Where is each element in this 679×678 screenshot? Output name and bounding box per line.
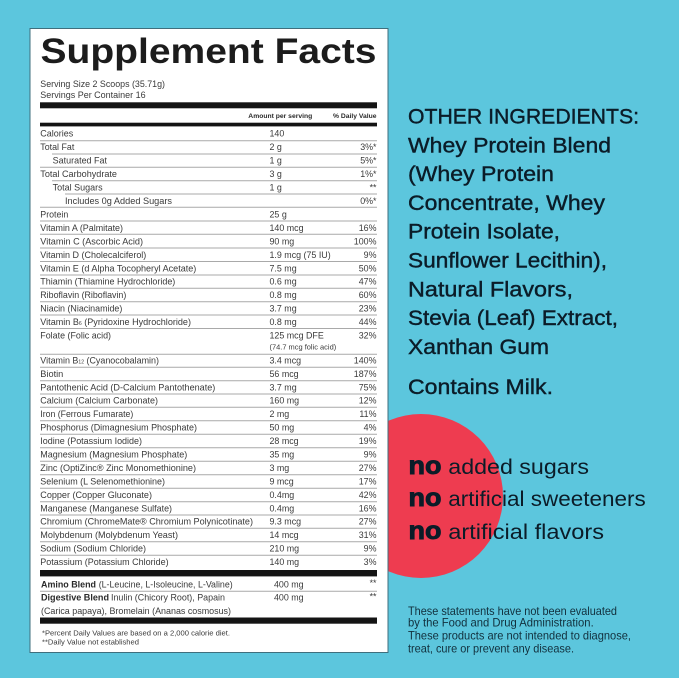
nutrient rows: Total Fat — [40, 142, 75, 152]
blends: 400 mg — [274, 593, 304, 603]
nutrient rows: 0%* — [360, 196, 377, 206]
nutrient rows: 23% — [359, 303, 377, 313]
nutrient rows: 3.7 mg — [270, 303, 297, 313]
nutrient rows: Vitamin A (Palmitate) — [40, 223, 123, 233]
nutrient rows: 1.9 mcg (75 IU) — [270, 250, 331, 260]
blends: Amino Blend — [41, 579, 96, 589]
nutrient rows: Thiamin (Thiamine Hydrochloride) — [40, 277, 175, 287]
nutrient rows: 27% — [359, 517, 377, 527]
nutrient rows: 27% — [359, 463, 377, 473]
nutrient rows: Sodium (Sodium Chloride) — [40, 544, 146, 554]
nutrient rows: Riboflavin (Riboflavin) — [40, 290, 126, 300]
nutrient rows: Pantothenic Acid (D-Calcium Pantothenate) — [40, 382, 215, 392]
nutrient rows: Iodine (Potassium Iodide) — [40, 436, 142, 446]
nutrient rows: 0.8 mg — [270, 317, 297, 327]
FDA disclaimer: These statements have not been evaluated — [408, 604, 617, 618]
nutrient rows: 140 mg — [270, 557, 299, 567]
nutrient rows: 31% — [359, 530, 377, 540]
nutrient rows: 50% — [359, 263, 377, 273]
other ingredients text: (Whey Protein — [408, 163, 554, 186]
nutrient rows — [40, 129, 377, 567]
nutrient rows: 3.7 mg — [270, 382, 297, 392]
claims list: no — [408, 452, 442, 480]
blends — [41, 578, 377, 616]
allergen note: Contains Milk. — [408, 376, 553, 399]
nutrient rows: 0.6 mg — [270, 277, 297, 287]
nutrient rows: Molybdenum (Molybdenum Yeast) — [40, 530, 178, 540]
claims list: no — [408, 517, 442, 545]
nutrient rows: 1 g — [270, 156, 282, 166]
nutrient rows: 187% — [354, 369, 377, 379]
nutrient rows: (74.7 mcg folic acid) — [270, 343, 336, 352]
nutrient rows: 210 mg — [270, 544, 299, 554]
nutrient rows: 3% — [364, 557, 377, 567]
nutrient rows: Saturated Fat — [53, 156, 108, 166]
nutrient rows: 1%* — [360, 169, 377, 179]
nutrient rows: 90 mg — [270, 236, 294, 246]
other ingredients text: Protein Isolate, — [408, 221, 560, 244]
nutrient rows: 35 mg — [270, 450, 294, 460]
blends: Digestive Blend — [41, 593, 109, 603]
other ingredients text: Natural Flavors, — [408, 279, 573, 302]
nutrient rows: 1 g — [270, 182, 282, 192]
nutrient rows: 9.3 mcg — [270, 517, 301, 527]
nutrient rows: Selenium (L Selenomethionine) — [40, 476, 165, 486]
FDA disclaimer: These products are not intended to diagnose, — [408, 628, 631, 642]
nutrient rows: 14 mcg — [270, 530, 299, 540]
nutrient rows: Vitamin D (Cholecalciferol) — [40, 250, 146, 260]
nutrient rows: 75% — [359, 382, 377, 392]
nutrient rows: 47% — [359, 277, 377, 287]
claims list: artificial flavors — [448, 520, 604, 544]
nutrient rows: 160 mg — [270, 396, 299, 406]
nutrient rows: Folate (Folic acid) — [40, 330, 111, 340]
nutrient rows: 9% — [364, 450, 377, 460]
claims list: added sugars — [448, 455, 589, 479]
claims list: no — [408, 484, 442, 512]
nutrient rows: 2 mg — [270, 409, 289, 419]
column headers: % Daily Value — [333, 113, 377, 120]
nutrient rows: 4% — [364, 422, 377, 432]
nutrient rows: Magnesium (Magnesium Phosphate) — [40, 450, 187, 460]
nutrient rows: Zinc (OptiZinc® Zinc Monomethionine) — [40, 463, 196, 473]
other ingredients text: Xanthan Gum — [408, 336, 549, 359]
nutrient rows: 11% — [359, 409, 377, 419]
nutrient rows: Biotin — [40, 369, 63, 379]
nutrient rows: 42% — [359, 490, 377, 500]
serving information — [40, 79, 165, 100]
footnotes: *Percent Daily Values are based on a 2,000 calorie diet. — [42, 630, 230, 637]
nutrient rows: 16% — [359, 503, 377, 513]
nutrient rows: 0.8 mg — [270, 290, 297, 300]
FDA disclaimer — [408, 604, 631, 655]
serving information: Servings Per Container 16 — [40, 90, 146, 100]
nutrient rows: 9 mcg — [270, 476, 294, 486]
nutrient rows: 56 mcg — [270, 369, 299, 379]
other ingredients text: Stevia (Leaf) Extract, — [408, 307, 618, 330]
nutrient rows: Potassium (Potassium Chloride) — [40, 557, 169, 567]
nutrient rows: Manganese (Manganese Sulfate) — [40, 503, 172, 513]
nutrient rows: 9% — [364, 250, 377, 260]
nutrient rows: 100% — [354, 236, 377, 246]
nutrient rows: Phosphorus (Dimagnesium Phosphate) — [40, 422, 197, 432]
nutrient rows: 0.4mg — [270, 503, 294, 513]
nutrient rows: Calcium (Calcium Carbonate) — [40, 396, 158, 406]
other ingredients text: Whey Protein Blend — [408, 134, 611, 157]
nutrient rows: 3.4 mcg — [270, 356, 301, 366]
icon: red circle behind claims — [339, 414, 503, 578]
other ingredients text — [408, 105, 639, 359]
nutrient rows: 3%* — [360, 142, 377, 152]
nutrient rows: 140% — [354, 356, 377, 366]
nutrient rows: Includes 0g Added Sugars — [65, 196, 173, 206]
other ingredients text: OTHER INGREDIENTS: — [408, 105, 639, 128]
blends: (L-Leucine, L-Isoleucine, L-Valine) — [99, 579, 233, 589]
serving information: Serving Size 2 Scoops (35.71g) — [40, 79, 165, 89]
FDA disclaimer: by the Food and Drug Administration. — [408, 616, 594, 630]
nutrient rows: 44% — [359, 317, 377, 327]
nutrient rows: Vitamin E (d Alpha Tocopheryl Acetate) — [40, 263, 196, 273]
nutrient rows: 125 mcg DFE — [270, 330, 324, 340]
nutrient rows: 9% — [364, 544, 377, 554]
panel: supplement facts label — [30, 28, 388, 652]
nutrient rows: Vitamin B12 (Cyanocobalamin) — [40, 356, 159, 366]
title: Supplement Facts — [40, 31, 376, 71]
nutrient rows: 140 mcg — [270, 223, 304, 233]
nutrient rows: 32% — [359, 330, 377, 340]
nutrient rows: Copper (Copper Gluconate) — [40, 490, 152, 500]
blends: Inulin (Chicory Root), Papain — [111, 593, 225, 603]
nutrient rows: Vitamin B6 (Pyridoxine Hydrochloride) — [40, 317, 191, 327]
nutrient rows: 5%* — [360, 156, 377, 166]
other ingredients text: Concentrate, Whey — [408, 192, 606, 215]
nutrient rows: 19% — [359, 436, 377, 446]
nutrient rows: 3 mg — [270, 463, 289, 473]
blends: (Carica papaya), Bromelain (Ananas cosmosus) — [41, 606, 231, 616]
FDA disclaimer: treat, cure or prevent any disease. — [408, 641, 574, 655]
nutrient rows: 25 g — [270, 210, 287, 220]
other ingredients text: Sunflower Lecithin), — [408, 250, 607, 273]
claims list: artificial sweeteners — [448, 487, 646, 511]
nutrient rows: 140 — [270, 129, 284, 139]
nutrient rows: 0.4mg — [270, 490, 294, 500]
nutrient rows: 60% — [359, 290, 377, 300]
nutrient rows: 2 g — [270, 142, 282, 152]
blends: 400 mg — [274, 579, 304, 589]
nutrient rows: Total Sugars — [53, 182, 103, 192]
nutrient rows: 16% — [359, 223, 377, 233]
column headers — [248, 113, 377, 120]
blends: ** — [370, 592, 377, 602]
footnotes: **Daily Value not established — [42, 640, 139, 647]
nutrient rows: Vitamin C (Ascorbic Acid) — [40, 236, 143, 246]
footnotes — [42, 630, 230, 647]
nutrient rows: 50 mg — [270, 422, 294, 432]
nutrient rows: Protein — [40, 210, 68, 220]
blends: ** — [370, 578, 377, 588]
nutrient rows: Niacin (Niacinamide) — [40, 303, 122, 313]
column headers: Amount per serving — [248, 113, 312, 120]
nutrient rows: 7.5 mg — [270, 263, 297, 273]
nutrient rows: Iron (Ferrous Fumarate) — [40, 409, 133, 419]
nutrient rows: 17% — [359, 476, 377, 486]
nutrient rows: Chromium (ChromeMate® Chromium Polynicotinate) — [40, 517, 253, 527]
nutrient rows: ** — [370, 182, 377, 192]
nutrient rows: Total Carbohydrate — [40, 169, 117, 179]
claims list — [408, 452, 646, 545]
nutrient rows: 3 g — [270, 169, 282, 179]
nutrient rows: Calories — [40, 129, 74, 139]
nutrient rows: 12% — [359, 396, 377, 406]
nutrient rows: 28 mcg — [270, 436, 299, 446]
